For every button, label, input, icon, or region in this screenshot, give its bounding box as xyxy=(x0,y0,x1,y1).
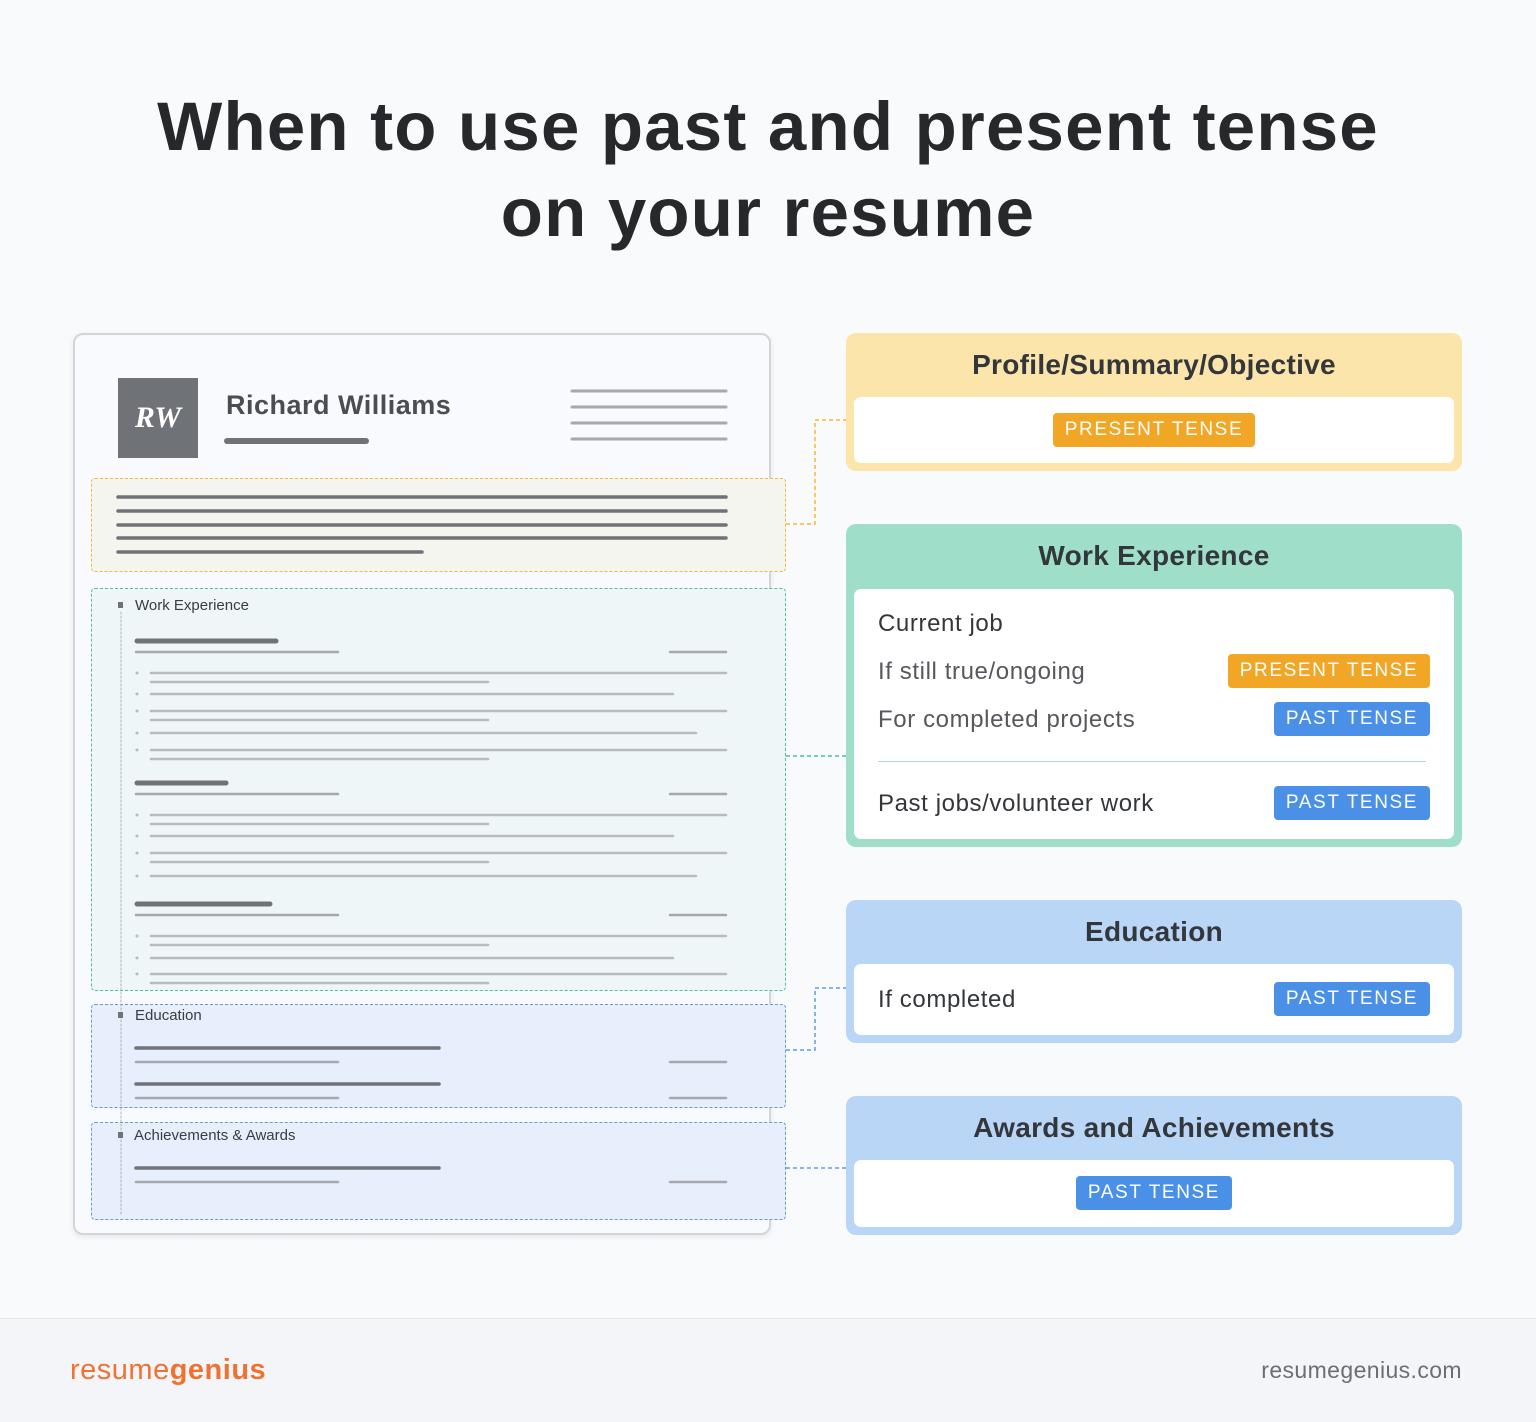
panel: education xyxy=(846,900,1462,1043)
panel: awards: Awards and Achievements xyxy=(973,1112,1335,1143)
logo text: resumegenius xyxy=(70,1354,266,1386)
panel: work experience xyxy=(846,524,1462,847)
monogram logo: RW xyxy=(135,401,181,434)
footer xyxy=(0,1318,1536,1422)
panel: education: If completed xyxy=(878,986,1016,1013)
panel: work experience: For completed projects xyxy=(878,706,1135,733)
panel: work experience: PRESENT TENSE xyxy=(1240,660,1418,681)
resume heading: awards: Achievements & Awards xyxy=(134,1127,295,1144)
panel: education: Education xyxy=(1085,916,1223,947)
panel: work experience: If still true/ongoing xyxy=(878,658,1085,685)
monogram logo xyxy=(118,378,198,458)
resume mockup xyxy=(73,333,771,1235)
panel: work experience: PAST TENSE xyxy=(1286,792,1418,813)
resume section: work experience xyxy=(91,588,786,991)
resume section: education xyxy=(91,1004,786,1108)
title: When to use past and present tense xyxy=(157,88,1379,165)
title xyxy=(157,88,1379,251)
resume section: awards xyxy=(91,1122,786,1220)
panel: education: PAST TENSE xyxy=(1286,988,1418,1009)
resume section: profile xyxy=(91,478,786,572)
resume name: Richard Williams xyxy=(226,390,451,420)
panel: work experience: PAST TENSE xyxy=(1286,708,1418,729)
title: on your resume xyxy=(501,174,1035,251)
website: resumegenius.com xyxy=(1261,1357,1462,1383)
panel: awards xyxy=(846,1096,1462,1235)
resume heading: education: Education xyxy=(135,1007,202,1024)
resume heading: work experience: Work Experience xyxy=(135,597,249,614)
connectors xyxy=(786,420,846,1168)
panel: awards: PAST TENSE xyxy=(1088,1182,1220,1203)
panel: profile: Profile/Summary/Objective xyxy=(972,349,1336,380)
panel: work experience: Current job xyxy=(878,610,1003,637)
panel: profile: PRESENT TENSE xyxy=(1065,419,1243,440)
panel: profile xyxy=(846,333,1462,471)
panel: work experience: Work Experience xyxy=(1038,540,1270,571)
panel: work experience: Past jobs/volunteer work xyxy=(878,790,1154,817)
